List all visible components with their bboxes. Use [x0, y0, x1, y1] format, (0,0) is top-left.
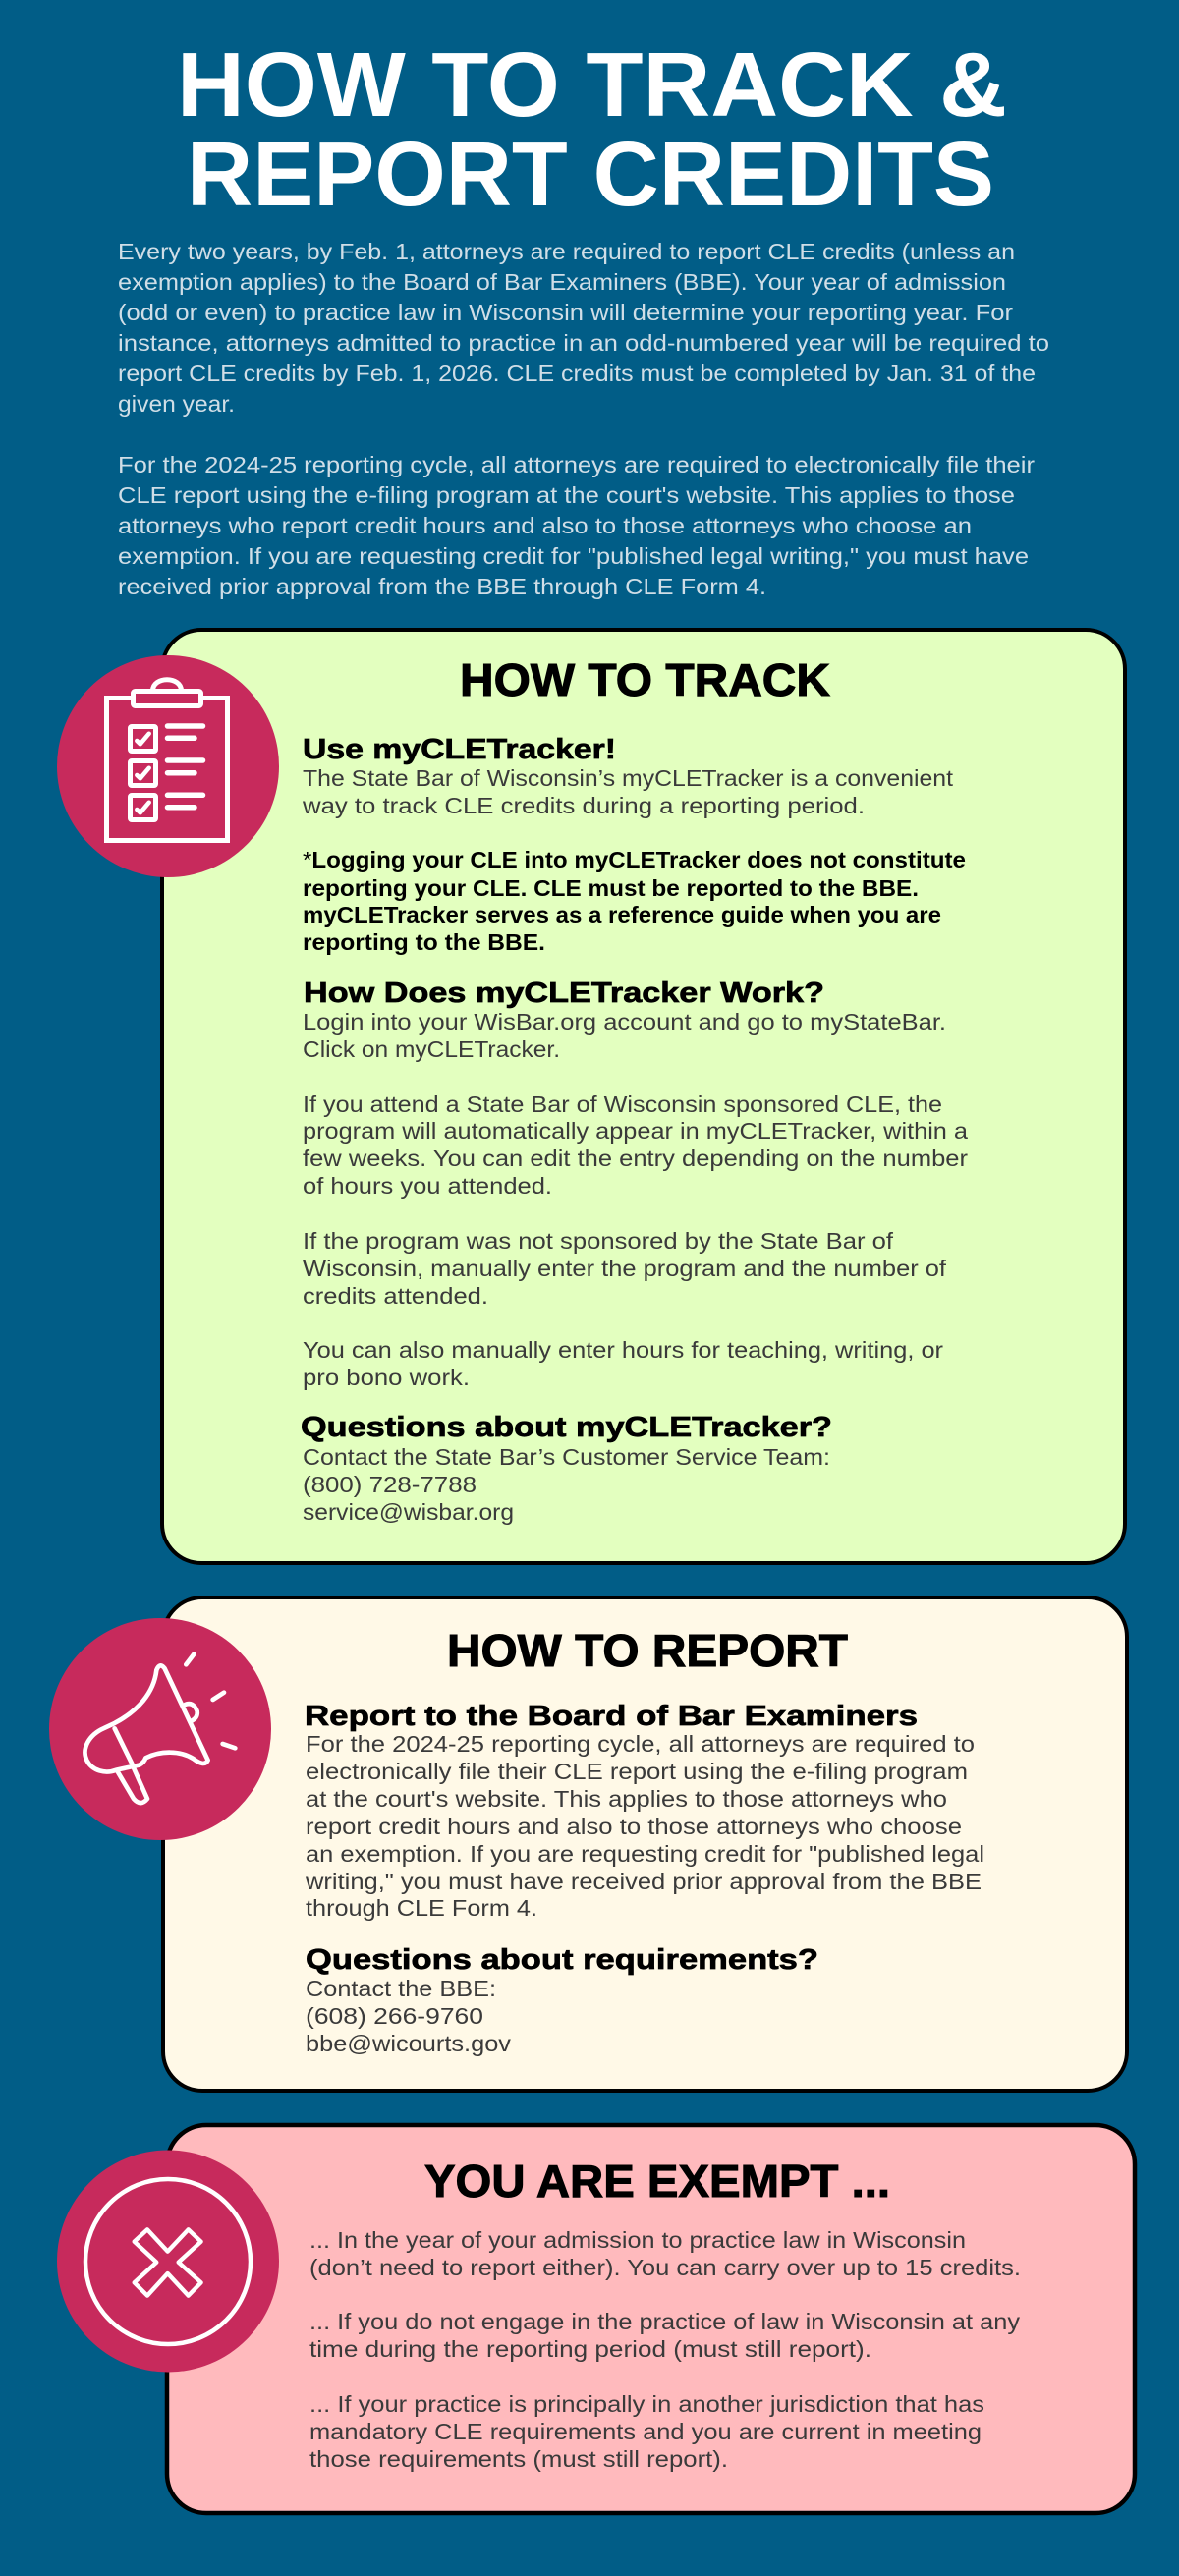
panel: you are exempt [167, 2125, 1135, 2513]
text: non-sponsored programs: If the program was not sponsored by the State Bar of [303, 1228, 894, 1254]
text: customer service contact: service@wisbar.org [303, 1499, 514, 1525]
text: bold notice [303, 847, 966, 955]
subheading: questions about requirements: Questions about requirements? [306, 1944, 818, 1976]
intro text block: e-filing: CLE report using the e-filing program at the court's website. This applies to those [118, 482, 1015, 508]
text: reporting instructions [305, 1731, 984, 1921]
title [177, 33, 1007, 225]
intro text block: e-filing: For the 2024-25 reporting cycle, all attorneys are required to electronically file their [118, 452, 1035, 477]
text: reporting instructions: For the 2024-25 reporting cycle, all attorneys are required to [306, 1731, 975, 1757]
text: BBE contact: Contact the BBE: [306, 1976, 496, 2001]
text: sponsored programs: few weeks. You can edit the entry depending on the number [303, 1146, 968, 1171]
text: reporting instructions: an exemption. If you are requesting credit for "published legal [306, 1841, 984, 1867]
heading: how to report: HOW TO REPORT [447, 1625, 848, 1676]
text: reporting instructions: report credit hours and also to those attorneys who choose [306, 1814, 962, 1839]
text: bold notice: *Logging your CLE into myCLETracker does not constitute [303, 847, 966, 872]
text: login steps [303, 1009, 946, 1062]
text: exemption for other jurisdiction [309, 2391, 984, 2472]
text: exemption for non-practice: time during the reporting period (must still report). [309, 2336, 871, 2362]
intro text block: e-filing: exemption. If you are requesting credit for "published legal writing," you must have [118, 543, 1029, 569]
intro text block: e-filing: received prior approval from the BBE through CLE Form 4. [118, 574, 766, 599]
text: manual entries: pro bono work. [303, 1365, 470, 1390]
text: manual entries [303, 1337, 943, 1390]
text: exemption for non-practice [309, 2309, 1021, 2362]
text: reporting instructions: through CLE Form 4. [306, 1895, 537, 1921]
text: about myCLETracker [302, 765, 954, 818]
panel: how to track [162, 630, 1125, 1563]
text: manual entries: You can also manually enter hours for teaching, writing, or [303, 1337, 943, 1363]
icon: X in circle [57, 2150, 279, 2372]
text: sponsored programs [303, 1092, 968, 1199]
intro text block: reporting requirement [118, 239, 1049, 417]
intro text block: reporting requirement: exemption applies) to the Board of Bar Examiners (BBE). Your year of admission [118, 269, 1006, 295]
text: non-sponsored programs: Wisconsin, manually enter the program and the number of [303, 1256, 947, 1281]
text: reporting instructions: writing," you must have received prior approval from the BBE [305, 1869, 982, 1894]
intro text block: reporting requirement: report CLE credits by Feb. 1, 2026. CLE credits must be completed by Jan. 31 of the [118, 361, 1036, 386]
text: customer service contact [303, 1444, 830, 1525]
text: BBE contact: (608) 266-9760 [306, 2003, 483, 2029]
text: bold notice: reporting your CLE. CLE must be reported to the BBE. [303, 875, 919, 901]
text: login steps: Click on myCLETracker. [303, 1036, 560, 1062]
text: exemption for year of admission: ... In the year of your admission to practice law in Wisconsin [309, 2227, 966, 2253]
text: sponsored programs: of hours you attended. [303, 1173, 552, 1199]
intro text block: reporting requirement: Every two years, by Feb. 1, attorneys are required to report CLE credits (unless an [118, 239, 1015, 264]
text: exemption for other jurisdiction: ... If your practice is principally in another jurisdiction that has [309, 2391, 984, 2417]
intro text block: reporting requirement: instance, attorneys admitted to practice in an odd-numbered year will be required to [118, 330, 1049, 356]
text: bold notice: myCLETracker serves as a reference guide when you are [303, 902, 941, 927]
text: exemption for year of admission [309, 2227, 1021, 2280]
text: BBE contact: bbe@wicourts.gov [306, 2031, 512, 2056]
text: exemption for other jurisdiction: those requirements (must still report). [309, 2446, 728, 2472]
intro text block: e-filing: attorneys who report credit hours and also to those attorneys who choose an [118, 513, 972, 538]
text: login steps: Login into your WisBar.org account and go to myStateBar. [303, 1009, 946, 1035]
title: REPORT CREDITS [187, 123, 994, 225]
text: customer service contact: Contact the State Bar’s Customer Service Team: [303, 1444, 830, 1470]
text: exemption for other jurisdiction: mandatory CLE requirements and you are current in meeting [309, 2419, 982, 2444]
text: customer service contact: (800) 728-7788 [303, 1472, 477, 1497]
subheading: questions about myCLETracker: Questions about myCLETracker? [301, 1412, 832, 1443]
subheading: use myCLETracker: Use myCLETracker! [303, 734, 616, 765]
text: about myCLETracker: way to track CLE credits during a reporting period. [302, 793, 865, 818]
heading: you are exempt: YOU ARE EXEMPT ... [424, 2156, 890, 2207]
text: BBE contact [306, 1976, 512, 2056]
intro text block: reporting requirement: (odd or even) to practice law in Wisconsin will determine your reporting year. For [118, 300, 1013, 325]
text: reporting instructions: electronically file their CLE report using the e-filing program [306, 1759, 968, 1784]
icon: megaphone [49, 1618, 271, 1840]
subheading: how does it work: How Does myCLETracker Work? [304, 978, 824, 1009]
text: non-sponsored programs: credits attended. [303, 1283, 488, 1309]
text: non-sponsored programs [303, 1228, 947, 1309]
text: exemption for year of admission: (don’t need to report either). You can carry over up to 15 credits. [309, 2255, 1021, 2280]
text: bold notice: reporting to the BBE. [303, 929, 545, 955]
subheading: report to the board: Report to the Board of Bar Examiners [305, 1701, 918, 1732]
intro text block: e-filing [118, 452, 1035, 599]
text: sponsored programs: If you attend a State Bar of Wisconsin sponsored CLE, the [303, 1092, 942, 1117]
icon: clipboard checklist [57, 655, 279, 877]
text: exemption for non-practice: ... If you do not engage in the practice of law in Wisconsin at any [309, 2309, 1021, 2334]
heading: how to track: HOW TO TRACK [460, 654, 830, 705]
text: sponsored programs: program will automatically appear in myCLETracker, within a [303, 1118, 968, 1144]
intro text block: reporting requirement: given year. [118, 391, 235, 417]
text: reporting instructions: at the court's website. This applies to those attorneys who [306, 1786, 947, 1812]
text: about myCLETracker: The State Bar of Wisconsin’s myCLETracker is a convenient [303, 765, 954, 791]
panel: how to report [163, 1597, 1127, 2091]
title: HOW TO TRACK & [177, 33, 1007, 136]
